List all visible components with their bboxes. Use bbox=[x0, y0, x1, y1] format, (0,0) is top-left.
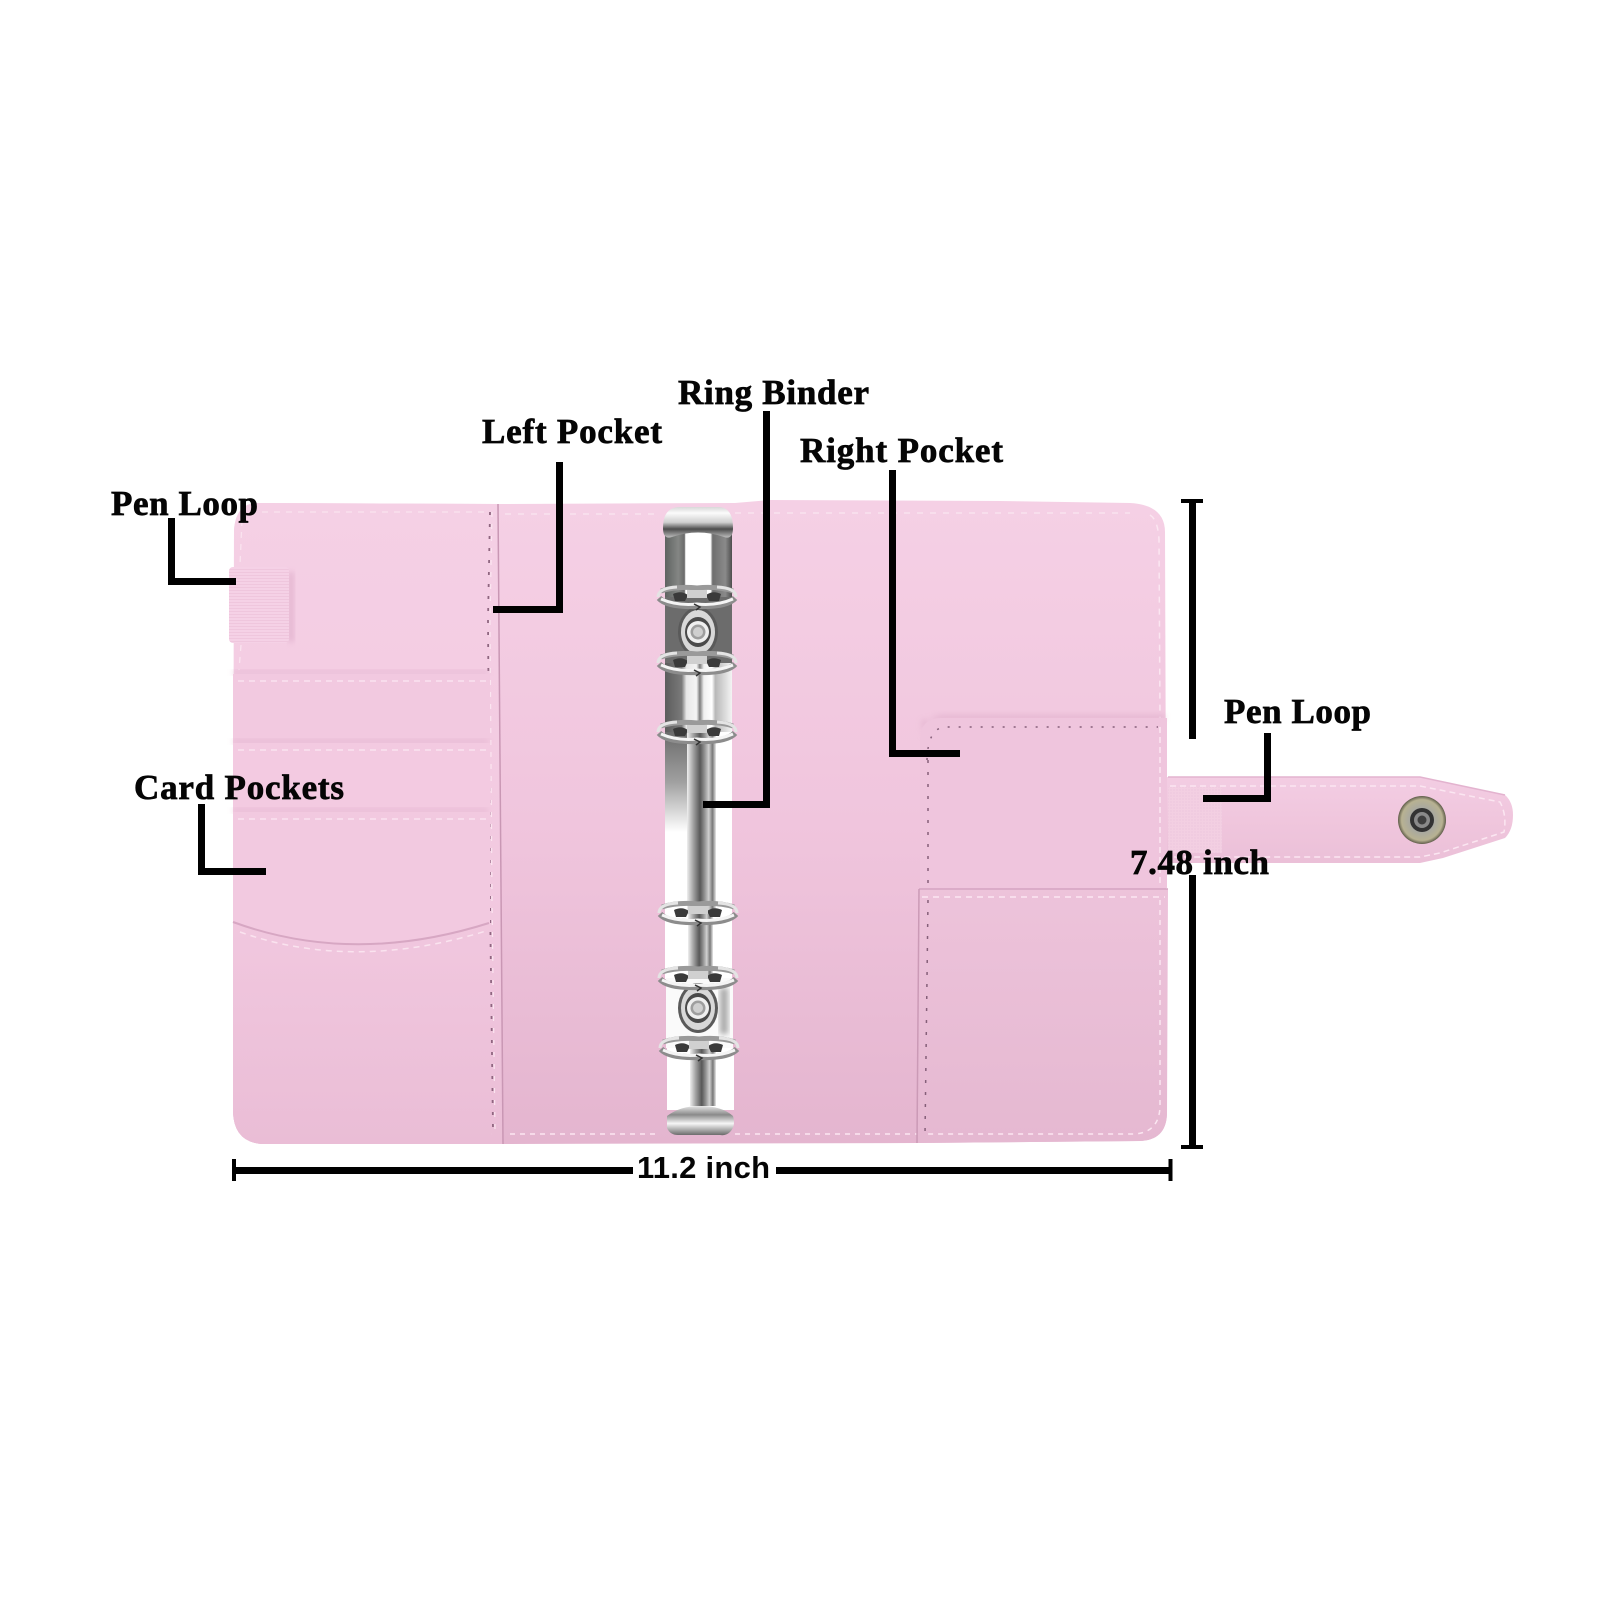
strap elastic loop bbox=[1168, 787, 1222, 853]
label: right pocket: Right Pocket bbox=[800, 431, 1003, 470]
card pocket 1 bbox=[233, 670, 490, 743]
ring 3 bbox=[658, 722, 736, 745]
label: left pocket: Left Pocket bbox=[482, 412, 662, 451]
ring binder mechanism bbox=[658, 507, 738, 1135]
leader: left pocket bbox=[493, 462, 560, 610]
snap button bbox=[1398, 796, 1446, 844]
label: pen loop left: Pen Loop bbox=[111, 484, 258, 523]
ring 4 bbox=[659, 903, 737, 926]
right upper pocket bbox=[920, 715, 1167, 888]
leader: right pocket bbox=[892, 470, 960, 754]
curved front pocket bbox=[233, 922, 492, 1144]
ring 2 bbox=[658, 653, 736, 676]
leader: ring binder bbox=[703, 411, 766, 804]
binder bottom cap bbox=[667, 1106, 734, 1135]
binder top cap bbox=[663, 507, 733, 538]
ring 6 bbox=[660, 1038, 738, 1061]
left panel stitching bbox=[488, 512, 493, 1130]
width dimension line bbox=[234, 1159, 1171, 1181]
binder strap with snap bbox=[1160, 777, 1513, 863]
right panel bbox=[917, 515, 1168, 1143]
ring 5 bbox=[659, 968, 737, 991]
binder cover bbox=[229, 500, 1168, 1144]
strap stitching bbox=[1170, 786, 1505, 857]
leader: pen loop right bbox=[1203, 733, 1268, 798]
binder plate top segment bbox=[665, 530, 732, 598]
binder plate with upper bolt bbox=[665, 597, 732, 663]
label: ring binder: Ring Binder bbox=[678, 373, 869, 412]
height label: 7.48 inch bbox=[1130, 843, 1269, 882]
binder plate second segment bbox=[665, 663, 732, 733]
leader: card pockets bbox=[202, 804, 266, 872]
label: pen loop right: Pen Loop bbox=[1224, 692, 1371, 731]
card pocket 2 bbox=[233, 739, 490, 812]
width label: 11.2 inch bbox=[637, 1150, 770, 1185]
binder plate with lower bolt bbox=[666, 978, 733, 1048]
label: card pockets: Card Pockets bbox=[134, 768, 344, 807]
card pocket 3 bbox=[233, 808, 490, 944]
height dimension line bbox=[1181, 501, 1203, 1147]
ring 1 bbox=[658, 587, 736, 610]
binder lower segment bbox=[665, 913, 732, 979]
pen loop band bbox=[229, 567, 294, 643]
leader: pen loop left bbox=[172, 518, 236, 582]
right lower pocket bbox=[917, 889, 1168, 1143]
middle panel stitching bbox=[505, 513, 1130, 1134]
upper bolt bbox=[678, 607, 718, 657]
lower bolt bbox=[678, 983, 718, 1033]
left panel bbox=[229, 503, 503, 1144]
binder bottom segment bbox=[667, 1048, 734, 1110]
binder long segment bbox=[665, 732, 732, 914]
